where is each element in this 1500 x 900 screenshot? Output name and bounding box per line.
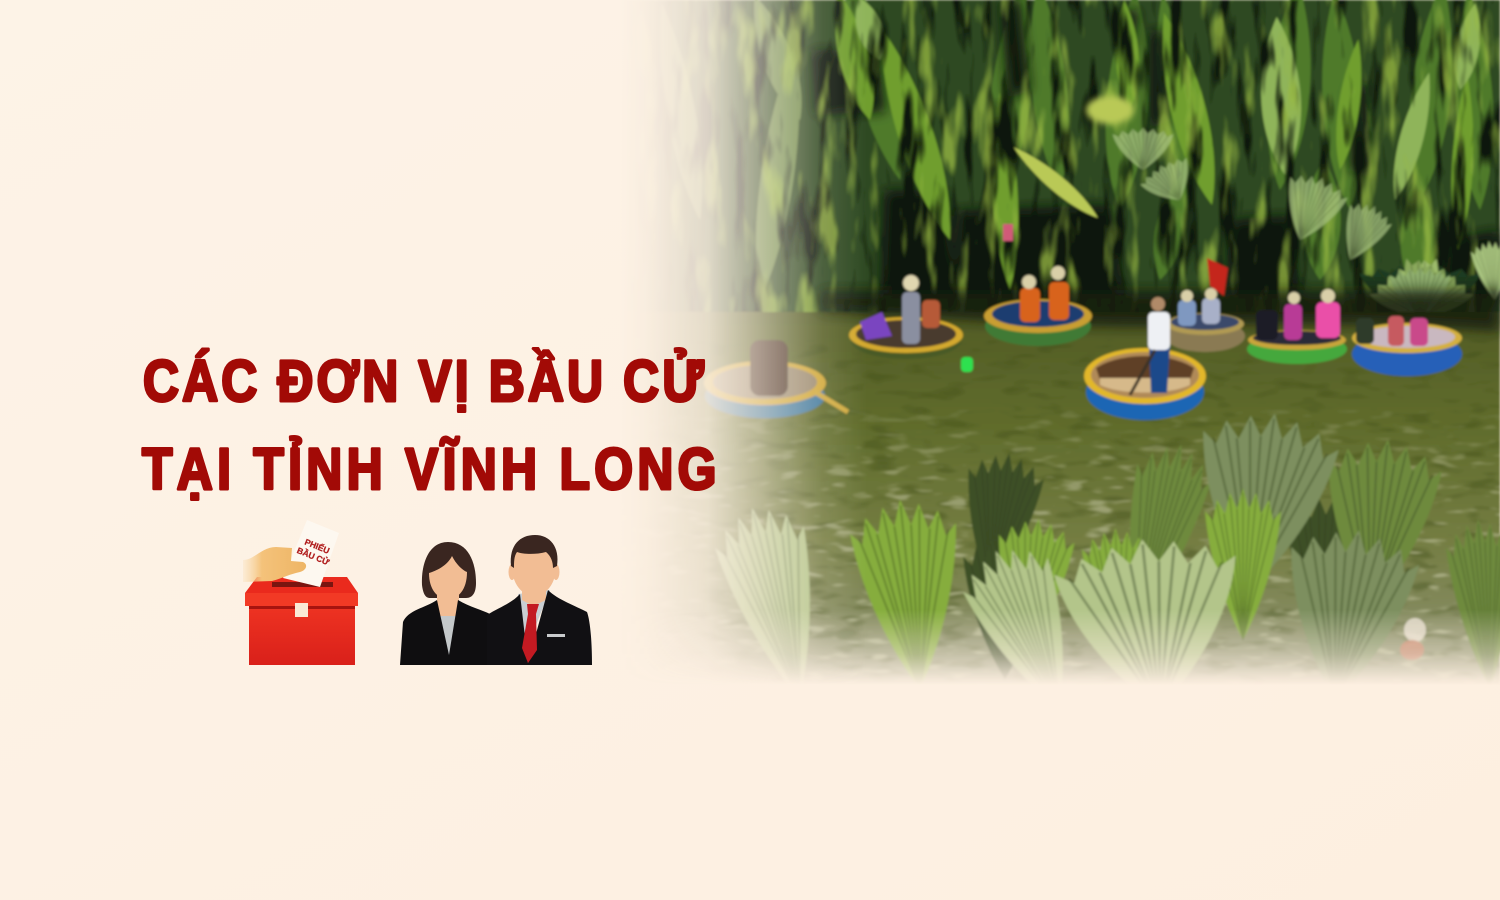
person in lower right corner [1400, 618, 1426, 660]
far left pale palms [754, 0, 803, 285]
boat 4 [1165, 288, 1245, 352]
boat 6 [1352, 316, 1462, 376]
leaf texture overlays [692, 0, 1500, 312]
dark gaps between palms [811, 0, 1500, 300]
woman [400, 542, 490, 665]
ballot box lid [245, 577, 358, 606]
bright blades [823, 0, 1478, 291]
icon: two candidates [400, 535, 592, 665]
boats [704, 224, 1462, 420]
man [487, 535, 592, 665]
big palm at right [1359, 239, 1500, 312]
ballot paper [283, 520, 339, 587]
ballot box body [249, 606, 355, 665]
ballot paper: BẦU CỬ [296, 544, 332, 568]
boat 1 [849, 275, 963, 359]
jungle backdrop [654, 0, 1500, 314]
river water [620, 290, 1500, 692]
icon: ballot box with hand [243, 520, 358, 665]
hand [243, 547, 306, 582]
green buoy [961, 357, 973, 372]
pink banner [1003, 224, 1013, 241]
boat 2 [984, 266, 1092, 346]
foreground palm fronds [708, 404, 1500, 727]
boat 3 with standing rower [1084, 297, 1206, 420]
title: TẠI TỈNH VĨNH LONG [142, 438, 716, 502]
mid tone blades [829, 0, 1499, 301]
photo: coracle boats on the nipa palm river [620, 0, 1500, 727]
boat 5 [1247, 289, 1347, 364]
yellow-green highlights [1009, 96, 1134, 224]
title [142, 350, 716, 502]
ballot paper: PHIẾU [303, 537, 331, 556]
title: CÁC ĐƠN VỊ BẦU CỬ [143, 350, 704, 414]
back dark fronds [952, 447, 1381, 680]
red flag [1207, 258, 1228, 296]
boat 7 (faded, left) [704, 340, 848, 418]
pale fans [1113, 128, 1396, 270]
